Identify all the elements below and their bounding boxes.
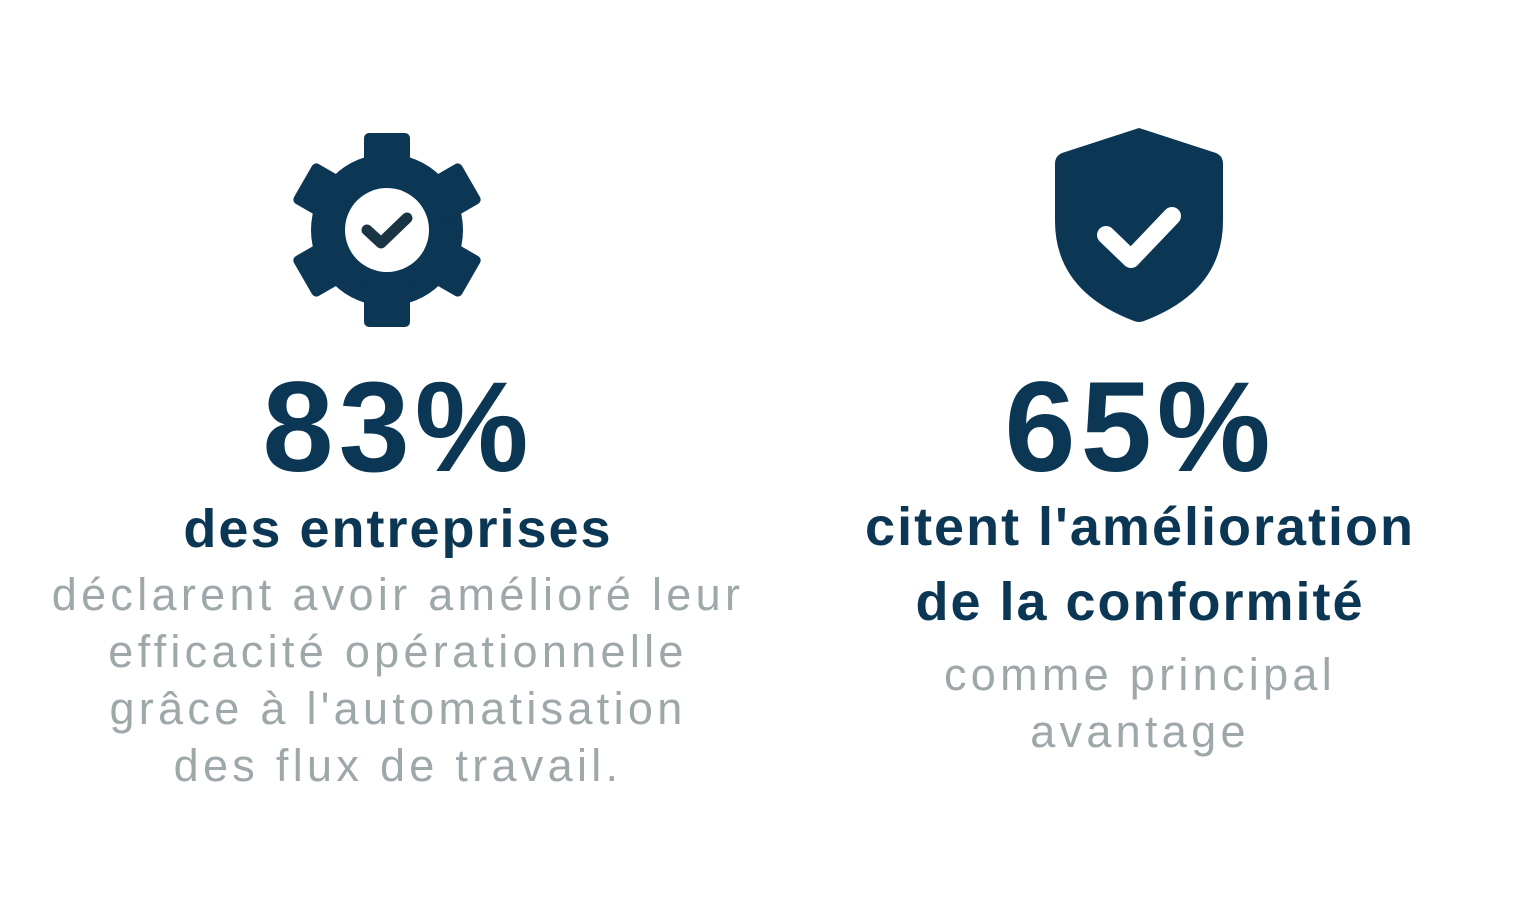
description left: efficacité opérationnelle: [108, 626, 688, 677]
label: conformité: citent l'amélioration: [865, 497, 1415, 557]
description right: [944, 649, 1336, 757]
stat number 83%: 83%: [262, 356, 534, 499]
stat number 65%: 65%: [1004, 356, 1276, 499]
icon: shield with check: [1055, 128, 1223, 322]
icon: gear with check: [293, 133, 481, 327]
label: conformité: [865, 497, 1415, 632]
description left: des flux de travail.: [174, 740, 622, 791]
label: conformité: de la conformité: [915, 572, 1365, 632]
description left: grâce à l'automatisation: [109, 683, 687, 734]
label: des entreprises: des entreprises: [183, 499, 613, 559]
description left: [52, 569, 744, 791]
description left: déclarent avoir amélioré leur: [52, 569, 744, 620]
description right: avantage: [1030, 706, 1250, 757]
description right: comme principal: [944, 649, 1336, 700]
